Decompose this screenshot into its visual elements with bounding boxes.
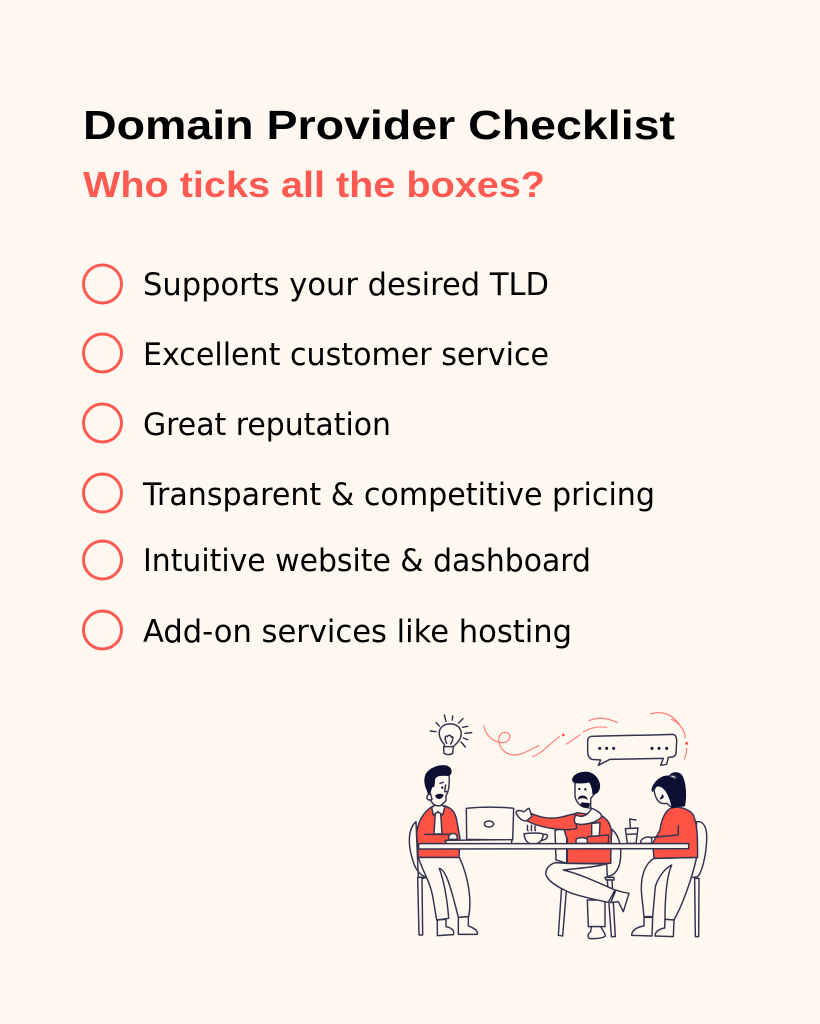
coffee cup [524,825,547,844]
subtitle: Who ticks all the boxes? [83,164,545,205]
speech bubble [588,734,677,765]
red squiggle lines [484,713,688,759]
person: woman [632,773,707,937]
person: middle man [516,772,621,939]
person: left man [409,765,477,936]
illustration: team at table [409,713,707,939]
checklist [84,265,655,650]
checklist item: reputation: Great reputation [143,407,391,443]
checklist item: add-ons: Add-on services like hosting [143,614,572,650]
drink cup [625,819,638,843]
checklist item: website: Intuitive website & dashboard [143,543,591,579]
checklist item: TLD: Supports your desired TLD [143,267,549,303]
checklist item: customer service: Excellent customer service [143,337,549,373]
title: Domain Provider Checklist [83,102,675,148]
middle man crossed leg [546,863,629,912]
laptop [445,807,514,844]
checklist item: pricing: Transparent & competitive pricing [142,477,655,513]
icon: light bulb [430,715,472,755]
table [419,844,689,849]
